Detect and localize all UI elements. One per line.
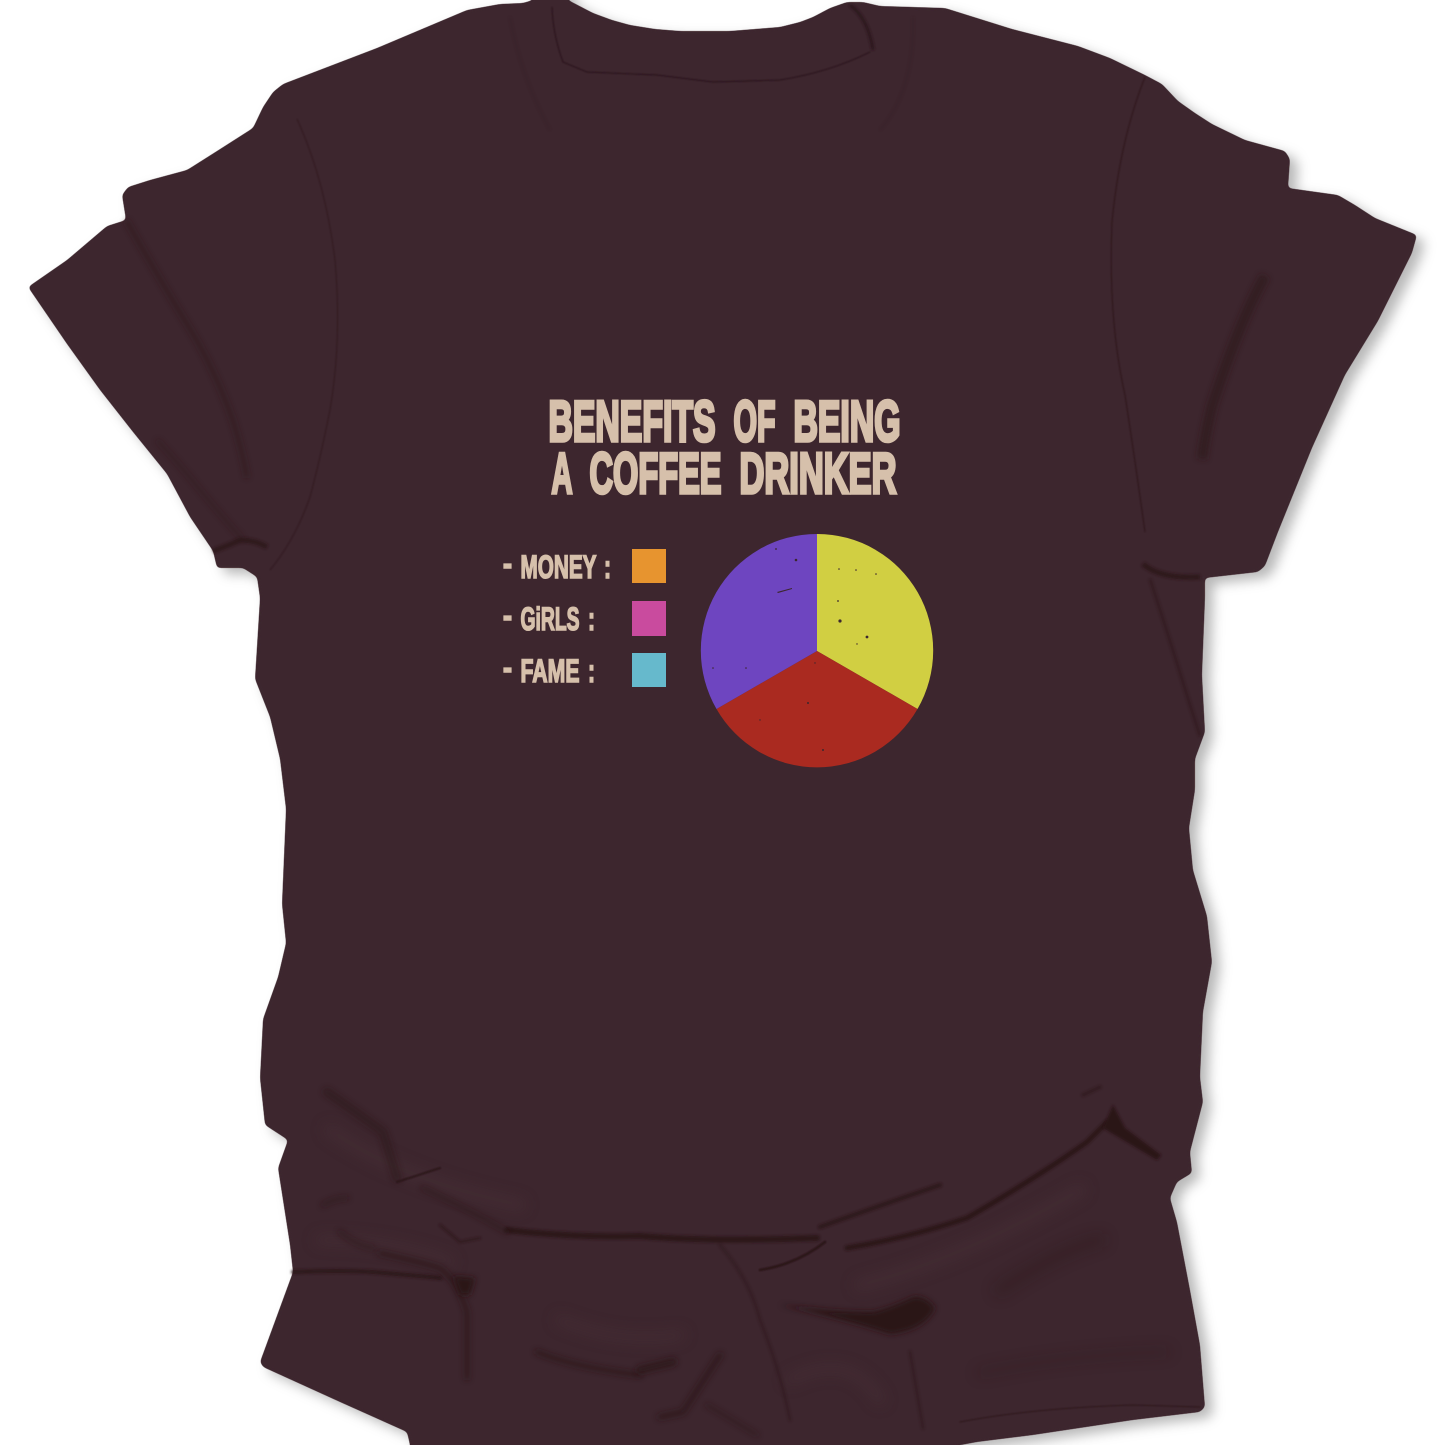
legend item: money: :: [604, 549, 611, 585]
title line 2: [552, 442, 896, 506]
title line 1: BENEFITS: [548, 390, 716, 454]
title: [548, 390, 900, 506]
legend item: fame: [503, 650, 666, 689]
legend item: money: MONEY: [520, 549, 596, 585]
title line 1: BEING: [794, 390, 900, 454]
legend item: money: -: [503, 546, 512, 582]
title line 2: COFFEE: [590, 442, 722, 506]
title line 2: A: [552, 442, 572, 506]
legend item: money: [503, 546, 666, 585]
slice: red: [716, 651, 918, 767]
legend item: girls: :: [588, 601, 595, 637]
sleeve seams and folds: [126, 77, 1265, 736]
legend item: fame: :: [588, 653, 595, 689]
legend item: fame: -: [503, 650, 512, 686]
dark fold shapes: [453, 1105, 1161, 1334]
title line 2: DRINKER: [740, 442, 896, 506]
collar seams: [510, 5, 913, 130]
title line 1: OF: [734, 390, 776, 454]
legend item: fame: FAME: [520, 653, 580, 689]
legend: [503, 546, 666, 689]
slice: purple: [701, 534, 817, 709]
pie chart: [701, 534, 933, 767]
slice: yellow: [817, 534, 933, 709]
legend item: girls: GiRLS: [520, 601, 580, 637]
lower wrinkles: [293, 1087, 1200, 1435]
legend item: girls: [503, 598, 666, 637]
legend item: girls: -: [503, 598, 512, 634]
speckle texture: [712, 548, 877, 751]
fabric highlights: [320, 1130, 1080, 1400]
